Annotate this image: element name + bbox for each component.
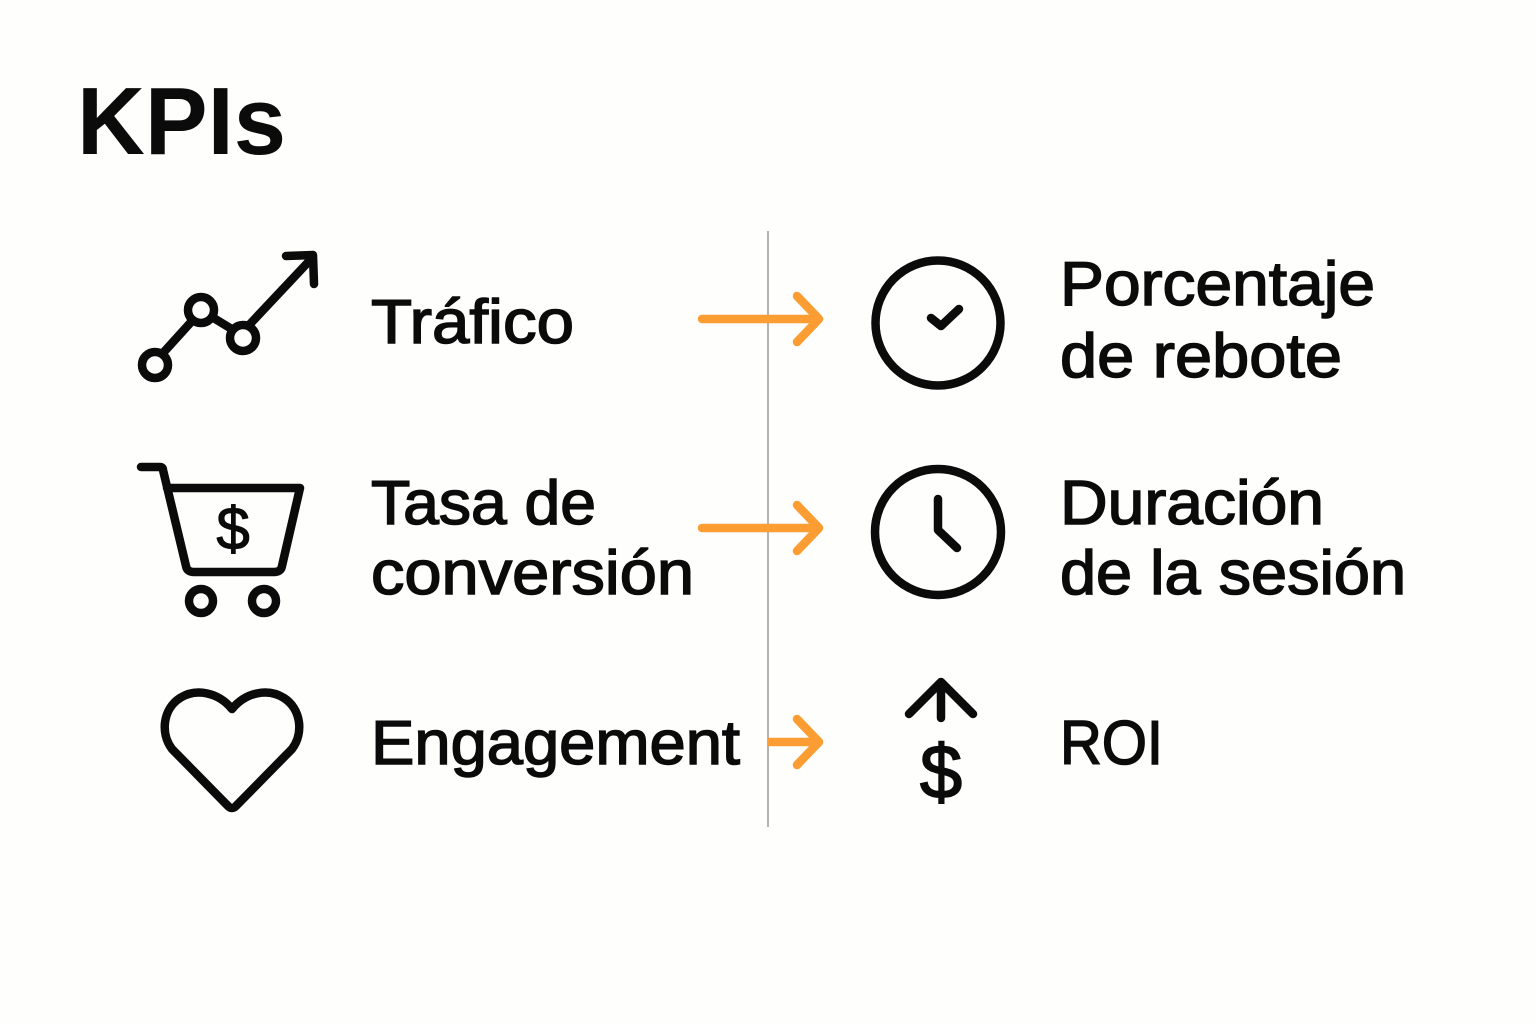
icon: trend line (142, 255, 314, 378)
title: KPIs (77, 68, 286, 175)
label: Tasa de conversión (371, 469, 694, 608)
arrow: Engagement to ROI (768, 719, 819, 765)
icon: session clock (875, 469, 1001, 595)
label: Duración de la sesión: Duración (1060, 469, 1324, 538)
label: Tráfico: Tráfico (371, 288, 574, 357)
label: Duración de la sesión: de la sesión (1060, 539, 1406, 608)
icon: heart (165, 693, 299, 808)
label: Porcentaje de rebote: de rebote (1060, 322, 1342, 391)
icon: ROI arrow up with dollar: $ (920, 730, 962, 815)
label: Duración de la sesión (1060, 469, 1406, 608)
icon: shopping cart with dollar: $ (216, 495, 250, 562)
label: ROI: ROI (1060, 709, 1163, 778)
icon: shopping cart with dollar (141, 467, 300, 613)
arrow: Tasa de conversión to Duración de la sesión (702, 505, 819, 551)
label: Tasa de conversión: Tasa de (371, 469, 596, 538)
icon: bounce rate clock with check (876, 260, 1000, 386)
label: Engagement: Engagement (371, 709, 740, 778)
label: Porcentaje de rebote (1060, 250, 1375, 391)
icon: ROI arrow up with dollar (909, 682, 973, 815)
label: Porcentaje de rebote: Porcentaje (1060, 250, 1375, 319)
arrow: Tráfico to Porcentaje de rebote (702, 296, 819, 342)
label: Tasa de conversión: conversión (371, 539, 694, 608)
